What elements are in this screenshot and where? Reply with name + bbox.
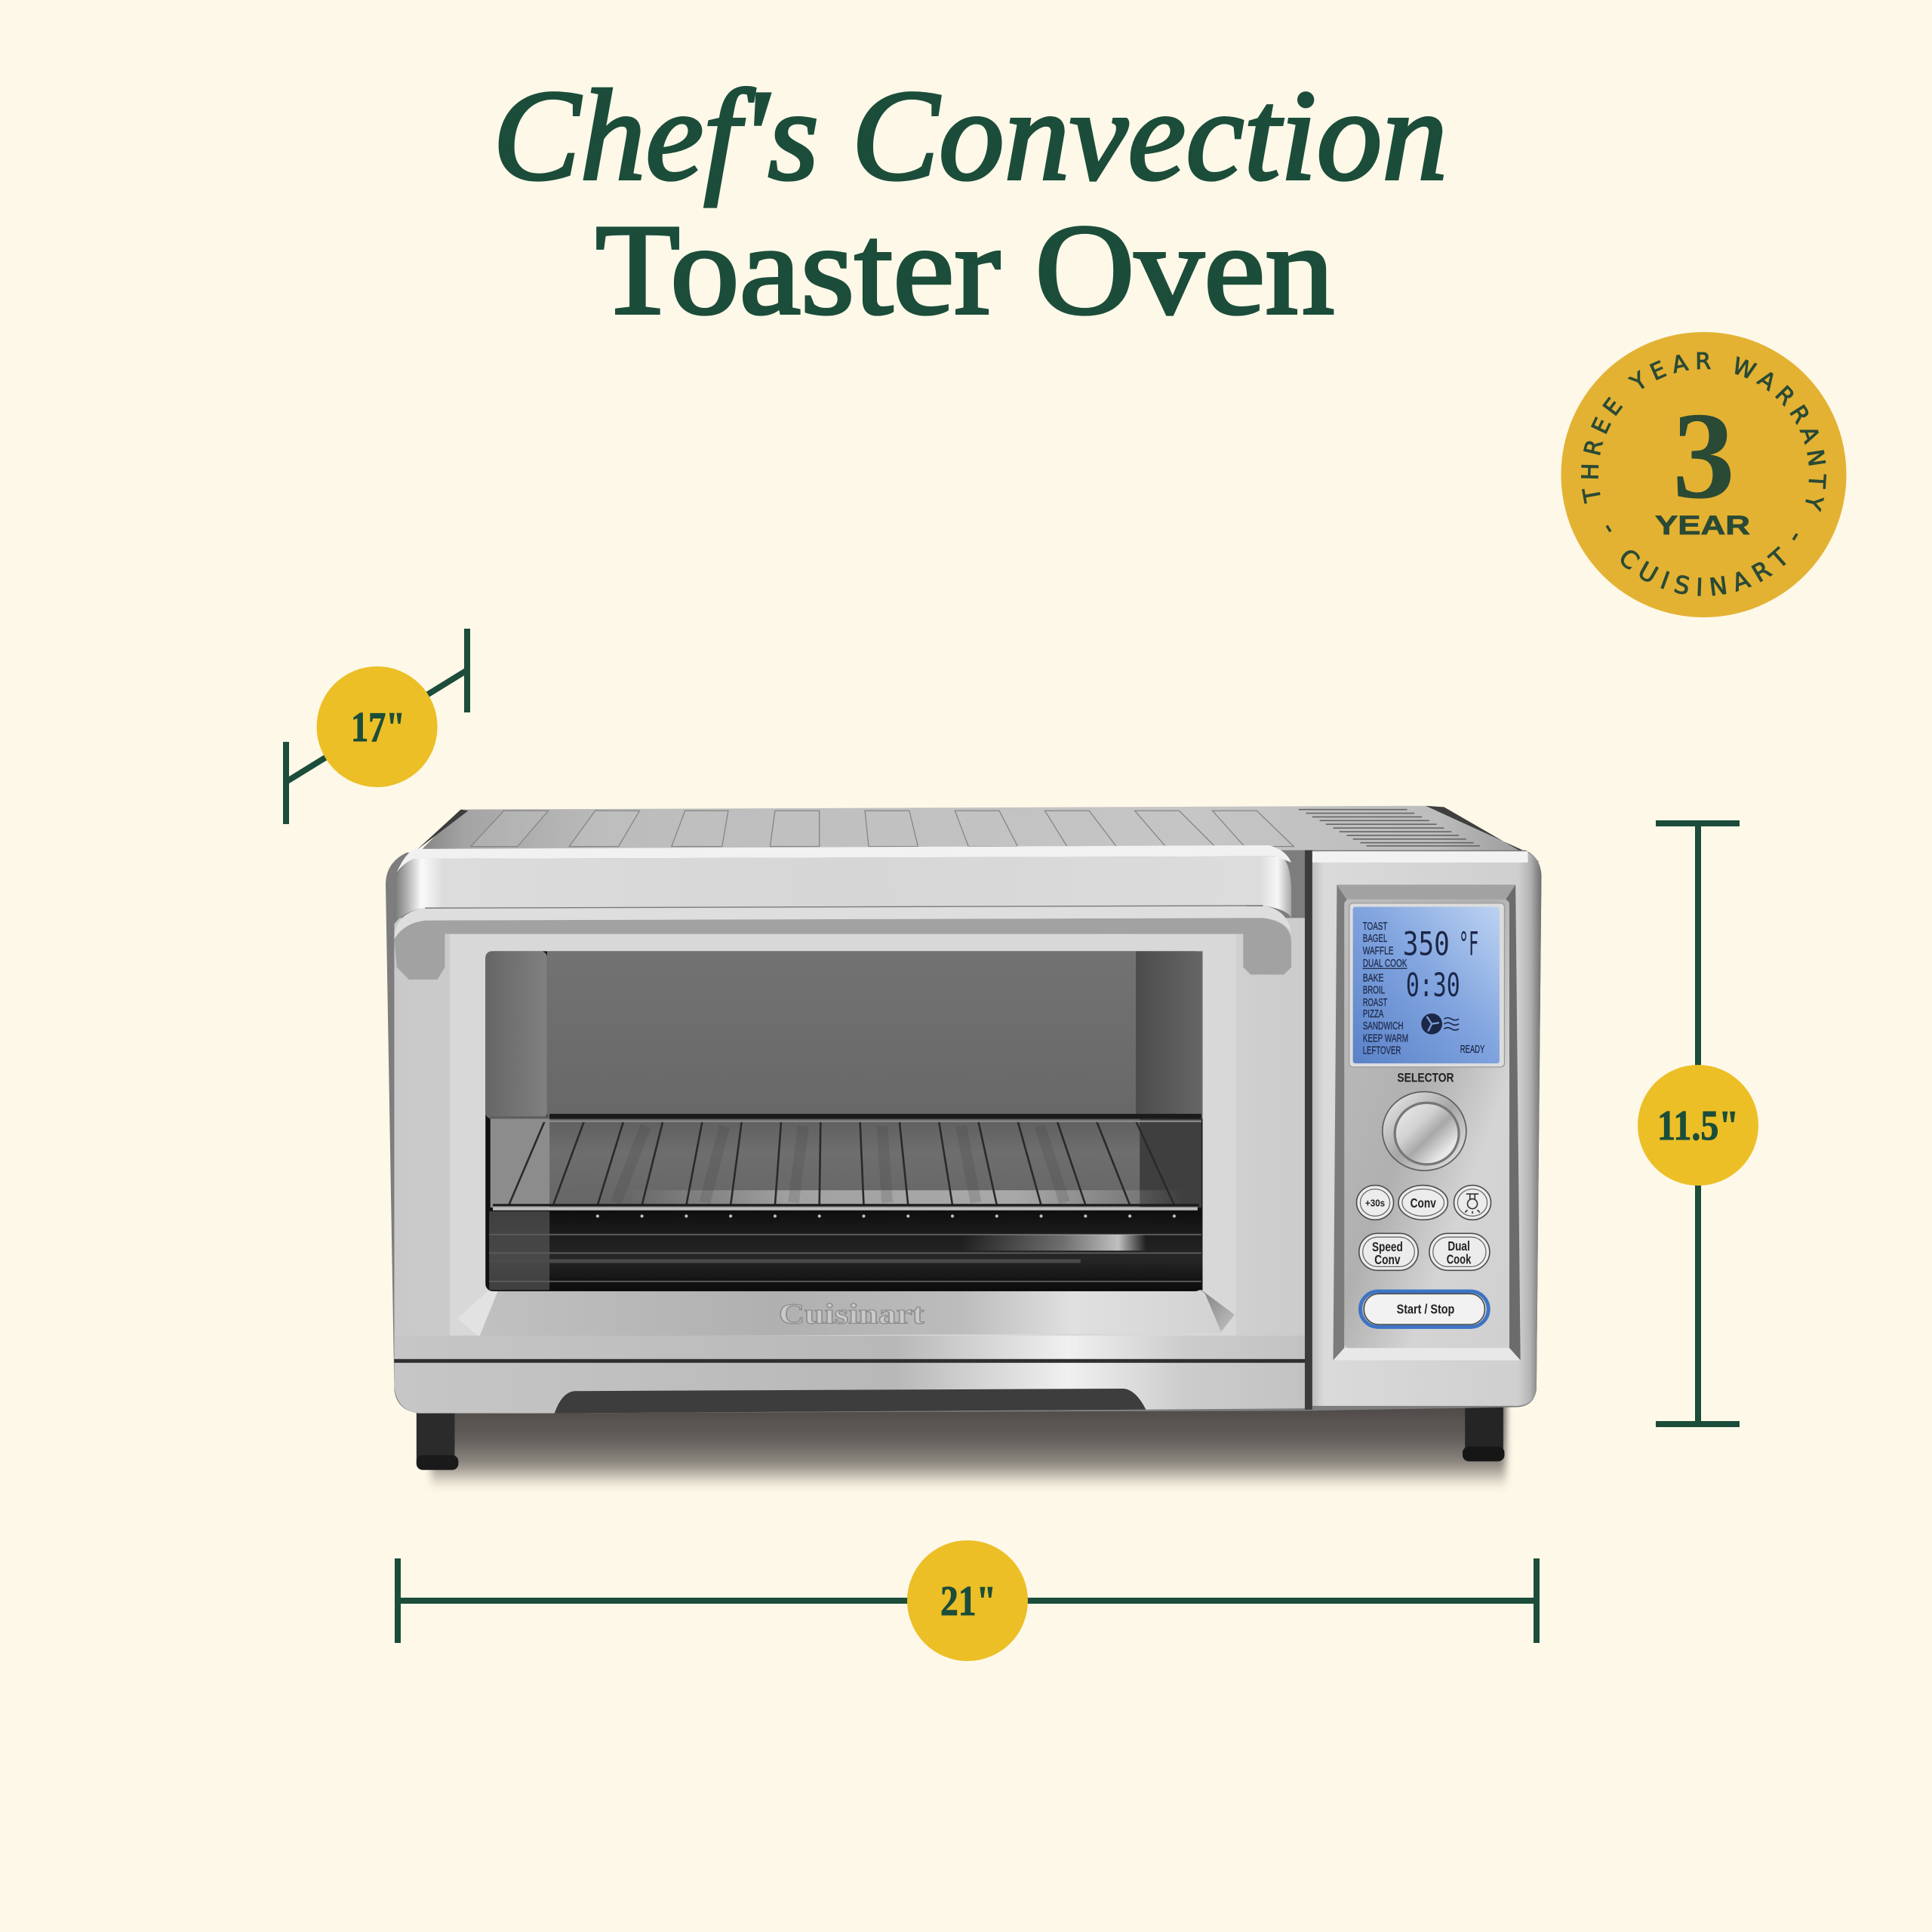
icon: oven light xyxy=(1465,1194,1480,1214)
lcd display: ROAST xyxy=(1363,997,1387,1009)
warranty badge: - xyxy=(1779,525,1808,547)
depth dimension: 17 inches: 17" xyxy=(351,704,405,751)
control buttons: +30s xyxy=(1365,1197,1385,1208)
height dimension: 11.5 inches: 11.5" xyxy=(1657,1103,1739,1149)
lcd display: 350 xyxy=(1403,926,1450,963)
lcd display: BROIL xyxy=(1363,985,1385,997)
selector label: SELECTOR xyxy=(1397,1071,1454,1084)
toaster oven xyxy=(386,806,1541,1490)
control buttons: Start / Stop xyxy=(1397,1301,1454,1316)
title: Toaster Oven xyxy=(595,198,1334,342)
lcd display: READY xyxy=(1460,1044,1484,1056)
width dimension: 21 inches: 21" xyxy=(940,1578,996,1625)
lcd display: BAGEL xyxy=(1363,933,1387,945)
oven rack xyxy=(491,1116,1201,1209)
lcd display: BAKE xyxy=(1363,972,1384,984)
floor shadow xyxy=(431,1398,1506,1490)
control buttons: Cook xyxy=(1447,1251,1472,1266)
control buttons: Conv xyxy=(1374,1252,1401,1267)
top panel with slots xyxy=(387,806,1540,877)
lcd display: TOAST xyxy=(1363,921,1387,933)
lcd display xyxy=(1349,903,1504,1067)
lcd display: DUAL COOK xyxy=(1363,958,1407,970)
warranty badge: 3 xyxy=(1672,386,1735,525)
depth dimension: 17 inches xyxy=(286,629,467,824)
oven floor xyxy=(489,1211,1202,1290)
bezel xyxy=(1334,884,1521,1360)
lcd display: °F xyxy=(1459,926,1478,963)
control panel xyxy=(1305,851,1541,1410)
lcd display: SANDWICH xyxy=(1363,1020,1404,1032)
warranty badge: YEAR xyxy=(1655,511,1750,540)
width dimension: 21 inches xyxy=(398,1540,1537,1661)
warranty badge: C U I S I N A R T xyxy=(1621,546,1786,596)
warranty badge xyxy=(1561,332,1846,617)
lower base xyxy=(394,1359,1305,1414)
oven body edge xyxy=(386,851,1541,1414)
lcd display: KEEP WARM xyxy=(1363,1032,1408,1044)
selector knob xyxy=(1383,1092,1466,1171)
door handle xyxy=(394,845,1291,980)
lcd display: PIZZA xyxy=(1363,1008,1384,1020)
control buttons: Conv xyxy=(1411,1195,1436,1211)
lcd display: LEFTOVER xyxy=(1363,1045,1401,1057)
title xyxy=(493,64,1447,342)
warranty badge: - xyxy=(1595,516,1625,539)
brushed plate xyxy=(1344,900,1509,1348)
icon: convection fan xyxy=(1421,1014,1459,1035)
logo: Cuisinart xyxy=(779,1299,924,1330)
warranty badge: THREE YEAR WARRANTY xyxy=(1580,352,1826,512)
feet xyxy=(417,1404,1504,1470)
control buttons: Speed xyxy=(1372,1239,1403,1254)
door xyxy=(394,918,1305,1359)
control buttons: Dual xyxy=(1447,1238,1470,1254)
door window xyxy=(485,951,1202,1291)
title: Chef's Convection xyxy=(493,64,1447,208)
lcd display: 0:30 xyxy=(1406,968,1460,1004)
lcd display: WAFFLE xyxy=(1363,945,1394,957)
height dimension: 11.5 inches xyxy=(1638,823,1758,1424)
control buttons xyxy=(1357,1186,1491,1327)
